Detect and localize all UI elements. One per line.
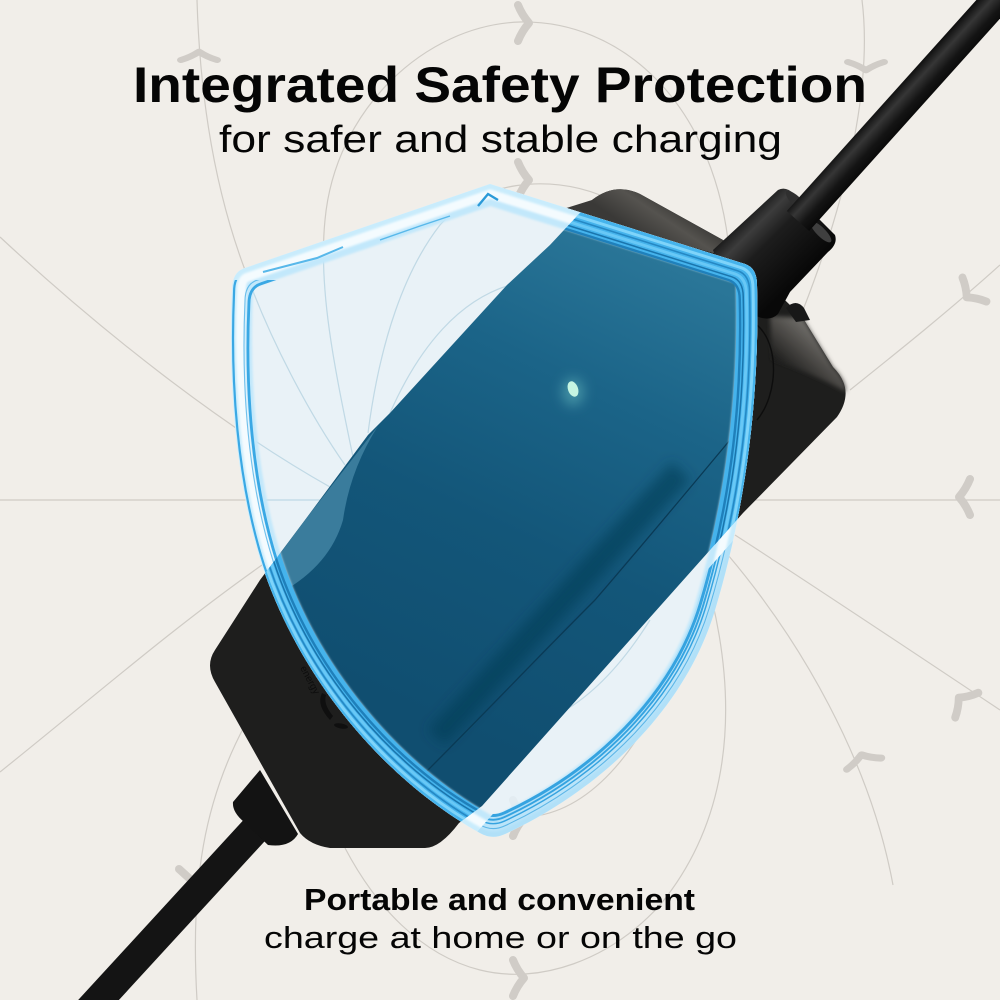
blue streaks, lower-right rim — [478, 541, 733, 837]
blue streaks, left rim — [232, 280, 277, 572]
right shoulder highlight — [770, 316, 846, 392]
body — [210, 189, 846, 848]
title: Integrated Safety Protection — [133, 57, 867, 113]
body logo mark: energy — [297, 664, 321, 696]
dark groove band — [428, 462, 690, 745]
subtitle: for safer and stable charging — [219, 119, 782, 161]
caption heading: Portable and convenient — [304, 882, 695, 917]
right contour — [757, 325, 774, 420]
lower strain relief — [233, 770, 298, 846]
lines through glass — [253, 221, 742, 709]
body logo mark — [297, 664, 348, 730]
upper strain relief — [713, 0, 1000, 319]
seam line — [420, 440, 730, 778]
lower cable — [82, 822, 262, 1000]
pale rim — [231, 184, 757, 837]
shielded device section — [280, 230, 758, 809]
protection shield — [231, 184, 758, 837]
status light — [562, 378, 584, 406]
upper face highlight — [560, 189, 745, 262]
upper cable — [798, 0, 1000, 221]
shield glass fill — [231, 184, 757, 837]
collar nub — [786, 303, 810, 322]
caption text: charge at home or on the go — [264, 920, 737, 955]
bright rim over device — [265, 212, 758, 822]
white inner rim — [231, 184, 757, 837]
blue streaks, top-left rim — [263, 194, 498, 272]
left corner sheen — [280, 427, 378, 586]
